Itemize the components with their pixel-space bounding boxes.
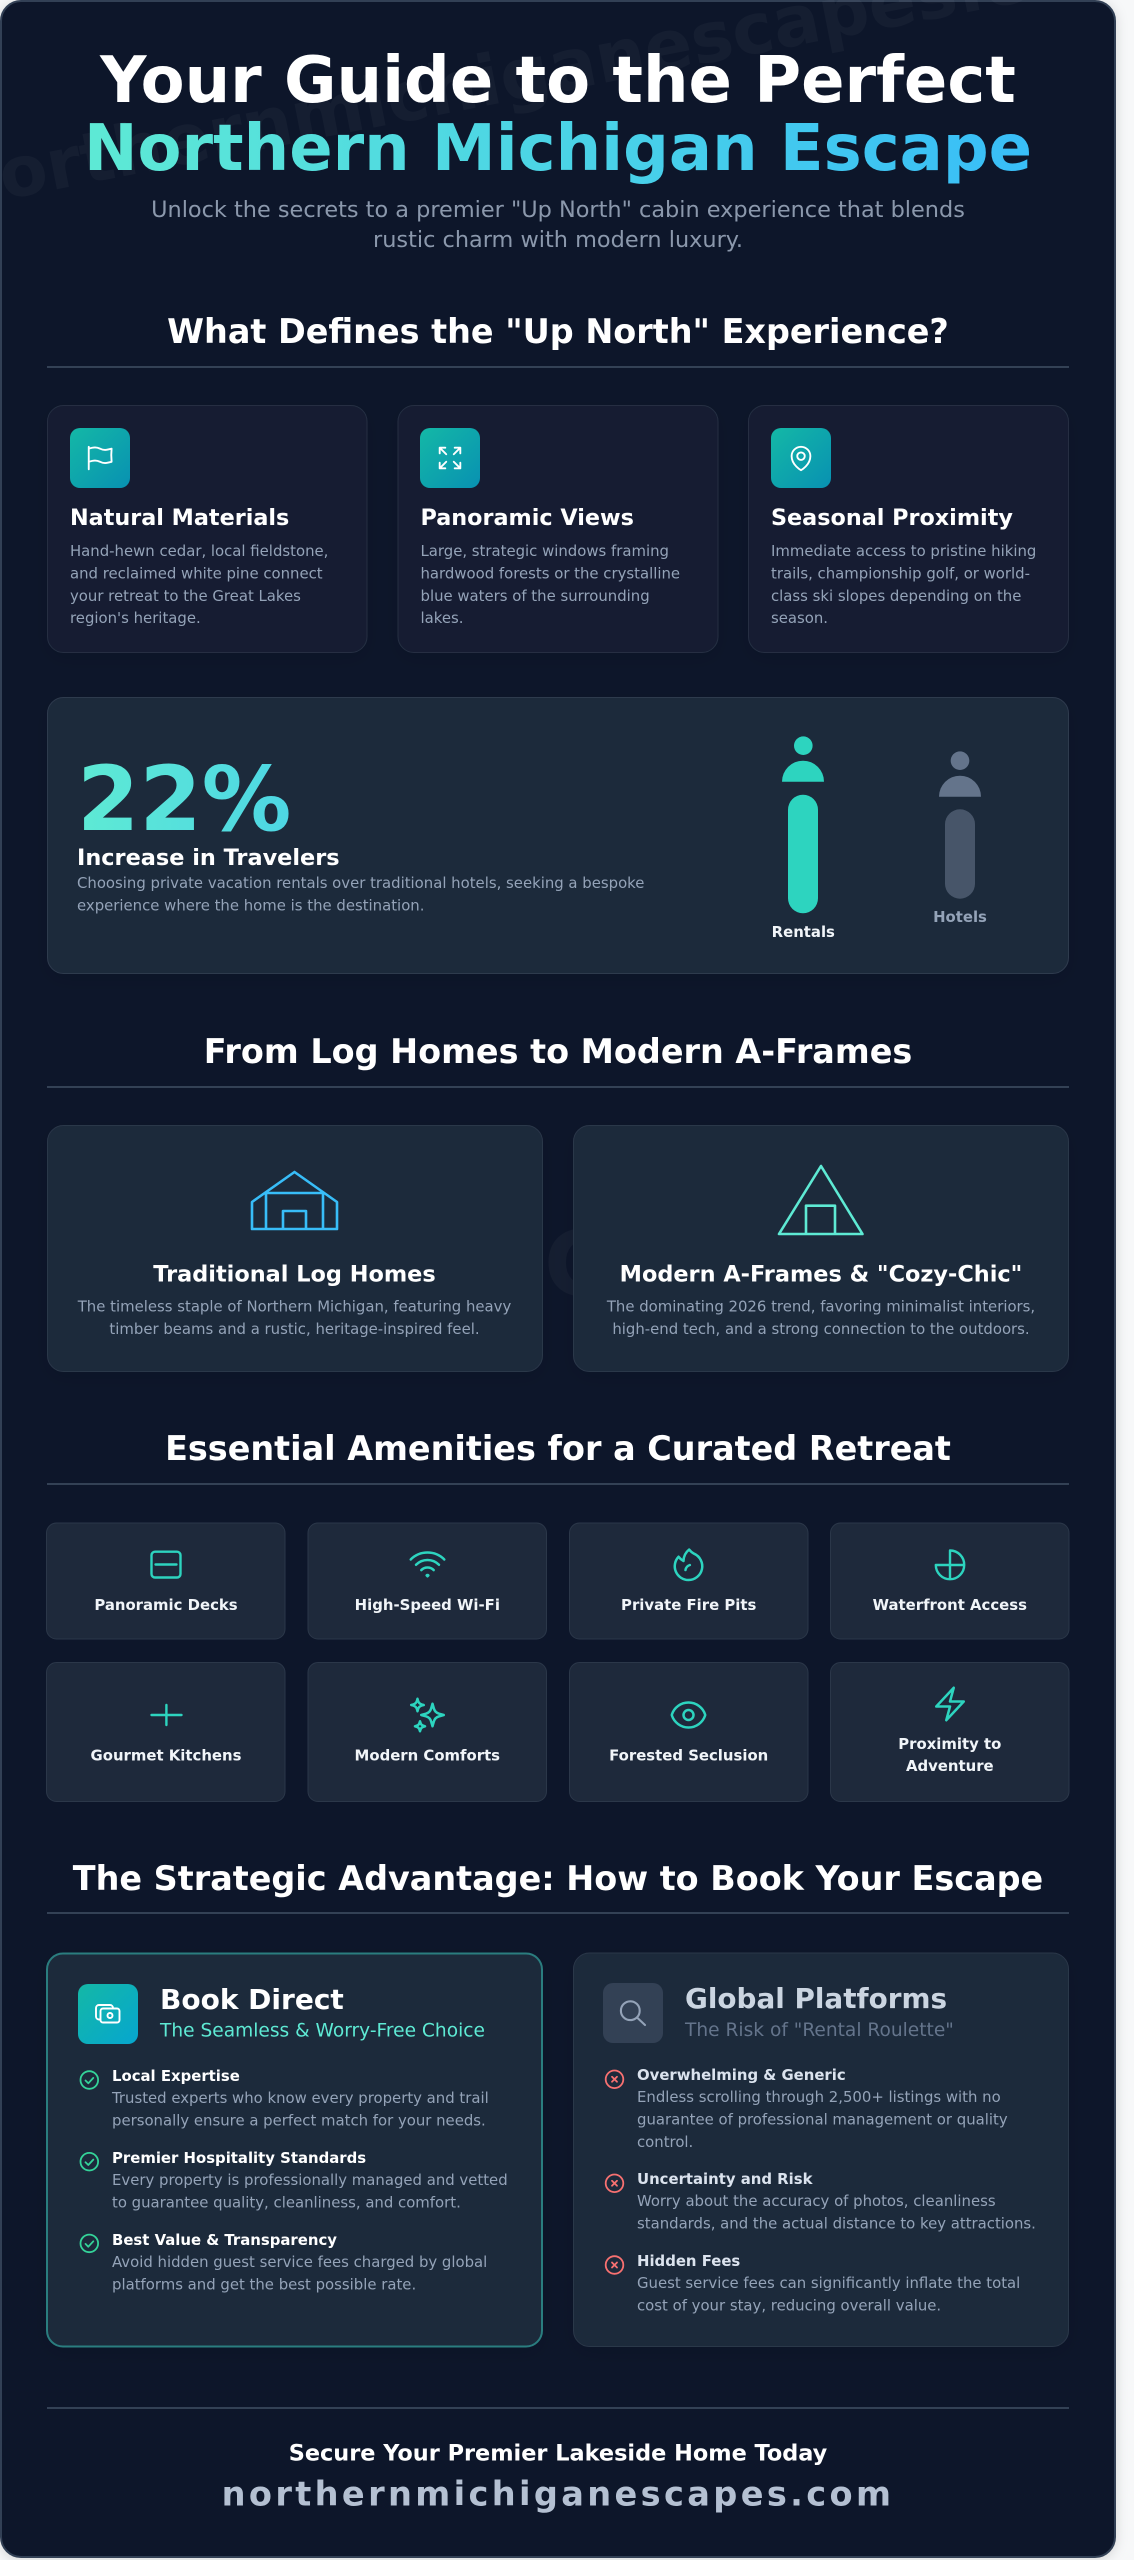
- stat description: Choosing private vacation rentals over traditional hotels, seeking a bespoke: [77, 874, 644, 892]
- amenity: Proximity to Adventure: [830, 1662, 1069, 1802]
- header: [84, 44, 1032, 253]
- item: Overwhelming & Generic: control.: [637, 2133, 693, 2151]
- card text: [420, 542, 680, 627]
- card title: Panoramic Views: [420, 505, 634, 531]
- figure: hotels: Hotels: [933, 908, 987, 926]
- call to action: Secure Your Premier Lakeside Home Today: [289, 2441, 828, 2467]
- card title: Traditional Log Homes: [153, 1262, 436, 1288]
- icon: flag: [70, 428, 130, 488]
- item: Premier Hospitality Standards: [80, 2149, 508, 2211]
- item: Hidden Fees: [606, 2252, 1020, 2314]
- item: Uncertainty and Risk: Uncertainty and Risk: [637, 2170, 814, 2188]
- amenity: Waterfront Access: Waterfront Access: [873, 1596, 1027, 1614]
- item: Best Value & Transparency: platforms and get the best possible rate.: [112, 2275, 416, 2293]
- item: Local Expertise: Trusted experts who know every property and trail: [111, 2089, 489, 2107]
- panel: Seasonal Proximity: [748, 406, 1068, 652]
- item: Local Expertise: Local Expertise: [112, 2067, 240, 2085]
- amenity: High-Speed Wi-Fi: High-Speed Wi-Fi: [355, 1596, 500, 1614]
- card text: region's heritage.: [70, 609, 201, 627]
- card text: and reclaimed white pine connect: [70, 564, 323, 582]
- amenity: Proximity to Adventure: Adventure: [906, 1757, 994, 1775]
- card text: high-end tech, and a strong connection to the outdoors.: [612, 1320, 1030, 1338]
- item: Uncertainty and Risk: standards, and the actual distance to key attractions.: [637, 2214, 1036, 2232]
- panel: Modern A-Frames: [574, 1126, 1068, 1372]
- amenity: Forested Seclusion: [570, 1662, 808, 1802]
- big number: 22%: [77, 748, 291, 852]
- figure: rentals: [772, 736, 835, 941]
- panel: Panoramic Views: [398, 406, 718, 652]
- item: Hidden Fees: Guest service fees can significantly inflate the total: [637, 2274, 1020, 2292]
- title line 1: Your Guide to the Perfect: [99, 44, 1016, 118]
- item: Overwhelming & Generic: Overwhelming & Generic: [637, 2066, 846, 2084]
- item: Best Value & Transparency: Best Value & Transparency: [112, 2231, 337, 2249]
- website: northernmichiganescapes.com: [222, 2475, 894, 2514]
- panel: statistic: [48, 698, 1068, 974]
- card text: Hand-hewn cedar, local fieldstone,: [70, 542, 328, 560]
- card text: [77, 1298, 511, 1338]
- figure: hotels: [933, 751, 987, 926]
- card text: blue waters of the surrounding: [420, 587, 650, 605]
- card text: Large, strategic windows framing: [420, 542, 669, 560]
- subtitle: Unlock the secrets to a premier "Up North" cabin experience that blends: [151, 197, 965, 223]
- panel: Book Direct: [47, 1954, 542, 2346]
- card text: Immediate access to pristine hiking: [771, 542, 1036, 560]
- stat description: experience where the home is the destination.: [77, 896, 424, 914]
- amenity: Gourmet Kitchens: Gourmet Kitchens: [91, 1747, 242, 1765]
- card title: Natural Materials: [70, 505, 289, 531]
- amenity: Panoramic Decks: Panoramic Decks: [94, 1596, 238, 1614]
- amenity: Waterfront Access: [830, 1523, 1069, 1639]
- item: Overwhelming & Generic: guarantee of professional management or quality: [637, 2110, 1008, 2128]
- panel: Traditional Log Homes: [48, 1126, 542, 1372]
- card subtitle: The Risk of "Rental Roulette": [684, 2020, 954, 2041]
- item: Best Value & Transparency: [80, 2231, 487, 2293]
- amenity: Proximity to Adventure: Proximity to: [898, 1735, 1001, 1753]
- icon: log home: [252, 1172, 337, 1229]
- title line 2: Northern Michigan Escape: [84, 112, 1032, 186]
- card title: Global Platforms: [685, 1982, 947, 2015]
- panel: Natural Materials: [48, 406, 367, 652]
- item: Premier Hospitality Standards: Every property is professionally managed and vetted: [112, 2171, 508, 2189]
- stat description: [77, 874, 644, 914]
- item: Best Value & Transparency: Avoid hidden guest service fees charged by global: [112, 2253, 487, 2271]
- item: Premier Hospitality Standards: to guarantee quality, cleanliness, and comfort.: [112, 2193, 461, 2211]
- item: Premier Hospitality Standards: Premier Hospitality Standards: [112, 2149, 366, 2167]
- amenity: Gourmet Kitchens: [46, 1662, 285, 1802]
- amenity: Private Fire Pits: [570, 1523, 808, 1639]
- panel: Global Platforms: [574, 1953, 1068, 2346]
- icon: expand arrows: [420, 428, 480, 488]
- card text: The timeless staple of Northern Michigan, featuring heavy: [77, 1298, 511, 1316]
- card text: timber beams and a rustic, heritage-inspired feel.: [109, 1320, 480, 1338]
- card subtitle: The Seamless & Worry-Free Choice: [159, 2021, 485, 2042]
- card text: season.: [771, 609, 828, 627]
- subtitle: rustic charm with modern luxury.: [373, 227, 743, 253]
- section heading: booking: The Strategic Advantage: How to Book Your Escape: [73, 1859, 1043, 1898]
- card text: hardwood forests or the crystalline: [420, 564, 680, 582]
- icon: map pin: [771, 428, 831, 488]
- card title: Modern A-Frames & "Cozy-Chic": [620, 1262, 1022, 1288]
- icon: search: [603, 1983, 663, 2043]
- item: Overwhelming & Generic: [606, 2066, 1008, 2151]
- card text: trails, championship golf, or world-: [771, 564, 1030, 582]
- card title: Book Direct: [160, 1983, 344, 2016]
- card text: your retreat to the Great Lakes: [70, 587, 301, 605]
- item: Local Expertise: personally ensure a perfect match for your needs.: [112, 2111, 486, 2129]
- card text: lakes.: [420, 609, 463, 627]
- amenity: High-Speed Wi-Fi: [308, 1523, 546, 1639]
- item: Uncertainty and Risk: [606, 2170, 1036, 2232]
- figure: rentals: Rentals: [772, 923, 835, 941]
- icon: banknotes: [78, 1984, 138, 2044]
- item: Uncertainty and Risk: Worry about the accuracy of photos, cleanliness: [637, 2192, 996, 2210]
- amenity: Modern Comforts: [308, 1662, 546, 1802]
- card text: [70, 542, 328, 627]
- section heading: styles: From Log Homes to Modern A-Frames: [204, 1032, 912, 1071]
- item: Hidden Fees: cost of your stay, reducing overall value.: [637, 2296, 941, 2314]
- watermark: center: C: [544, 1212, 610, 1317]
- card text: class ski slopes depending on the: [771, 587, 1021, 605]
- amenity: Modern Comforts: Modern Comforts: [355, 1747, 500, 1765]
- amenity: Private Fire Pits: Private Fire Pits: [621, 1596, 756, 1614]
- card title: Seasonal Proximity: [771, 505, 1013, 531]
- card text: [606, 1298, 1035, 1338]
- subtitle: [151, 197, 965, 253]
- item: Hidden Fees: Hidden Fees: [637, 2252, 740, 2270]
- item: Local Expertise: [80, 2067, 489, 2129]
- section heading: amenities: Essential Amenities for a Curated Retreat: [165, 1429, 951, 1468]
- card text: [771, 542, 1036, 627]
- item: Overwhelming & Generic: Endless scrolling through 2,500+ listings with no: [637, 2088, 1001, 2106]
- stat label: Increase in Travelers: [77, 845, 340, 871]
- amenity: Panoramic Decks: [46, 1523, 285, 1639]
- footer: [47, 2407, 1069, 2514]
- amenity: Forested Seclusion: Forested Seclusion: [609, 1747, 768, 1765]
- card text: The dominating 2026 trend, favoring minimalist interiors,: [606, 1298, 1035, 1316]
- icon: a-frame: [779, 1166, 862, 1234]
- section heading: Up North: What Defines the "Up North" Experience?: [167, 312, 949, 351]
